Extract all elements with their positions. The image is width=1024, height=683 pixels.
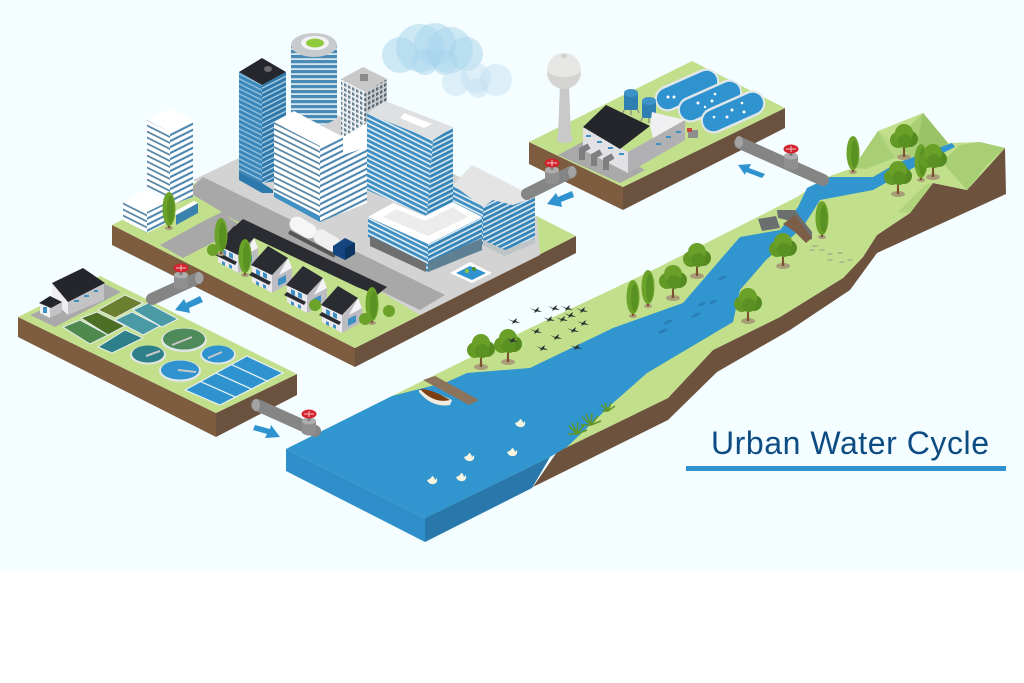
ferns (568, 403, 615, 434)
land cliff (533, 148, 1006, 487)
pipe: water plant to city (527, 158, 576, 194)
arrow: to lake (253, 425, 280, 438)
side road (160, 212, 243, 258)
building: hotel podium (368, 202, 482, 272)
silos (623, 89, 657, 123)
hills (853, 113, 1005, 213)
house row roof (233, 219, 387, 295)
swans (427, 419, 525, 484)
building: large blue office (367, 101, 453, 216)
building: gray tower (341, 67, 387, 150)
panel: water treatment plant (529, 61, 785, 210)
title underline (686, 466, 1006, 471)
blue basins (185, 356, 283, 405)
building: dark tower (239, 58, 286, 193)
treatment building (39, 268, 105, 318)
lake and river water (286, 143, 955, 518)
arrow: to water plant (738, 164, 765, 178)
houses (215, 226, 362, 333)
arrow: to treatment plant (175, 296, 203, 313)
plant building (582, 105, 698, 173)
circular clarifiers (130, 328, 236, 382)
lake front faces (286, 449, 425, 542)
pipe: treatment plant to lake (252, 399, 316, 436)
fish shadows (658, 275, 726, 334)
gray pad (30, 283, 121, 327)
flock of birds (506, 305, 589, 351)
arrow: to city (547, 191, 574, 207)
building: cylinder tower (291, 33, 337, 126)
clouds (382, 23, 512, 98)
river landscape (286, 113, 1006, 542)
building: left tower (147, 108, 198, 225)
bridge (758, 210, 853, 263)
pipe: city to treatment plant (152, 264, 203, 299)
tanker truck (289, 224, 355, 260)
panel: sewage treatment plant (18, 268, 297, 437)
settling ponds (651, 64, 769, 138)
pool (450, 262, 492, 283)
land surface (392, 113, 1005, 470)
city trees (162, 192, 395, 325)
building: white office (274, 111, 367, 222)
plaza (193, 113, 540, 315)
rectangular basins (63, 295, 178, 353)
building: low wing (123, 190, 167, 233)
water tower (547, 53, 581, 143)
gray pad (558, 138, 645, 183)
panel: city block (112, 33, 576, 367)
dock and boat (419, 376, 479, 405)
building: right wing (453, 165, 535, 256)
title: Urban Water Cycle (711, 425, 989, 461)
road (183, 177, 445, 310)
river trees (467, 124, 947, 370)
pipe: river to water plant (735, 136, 823, 180)
